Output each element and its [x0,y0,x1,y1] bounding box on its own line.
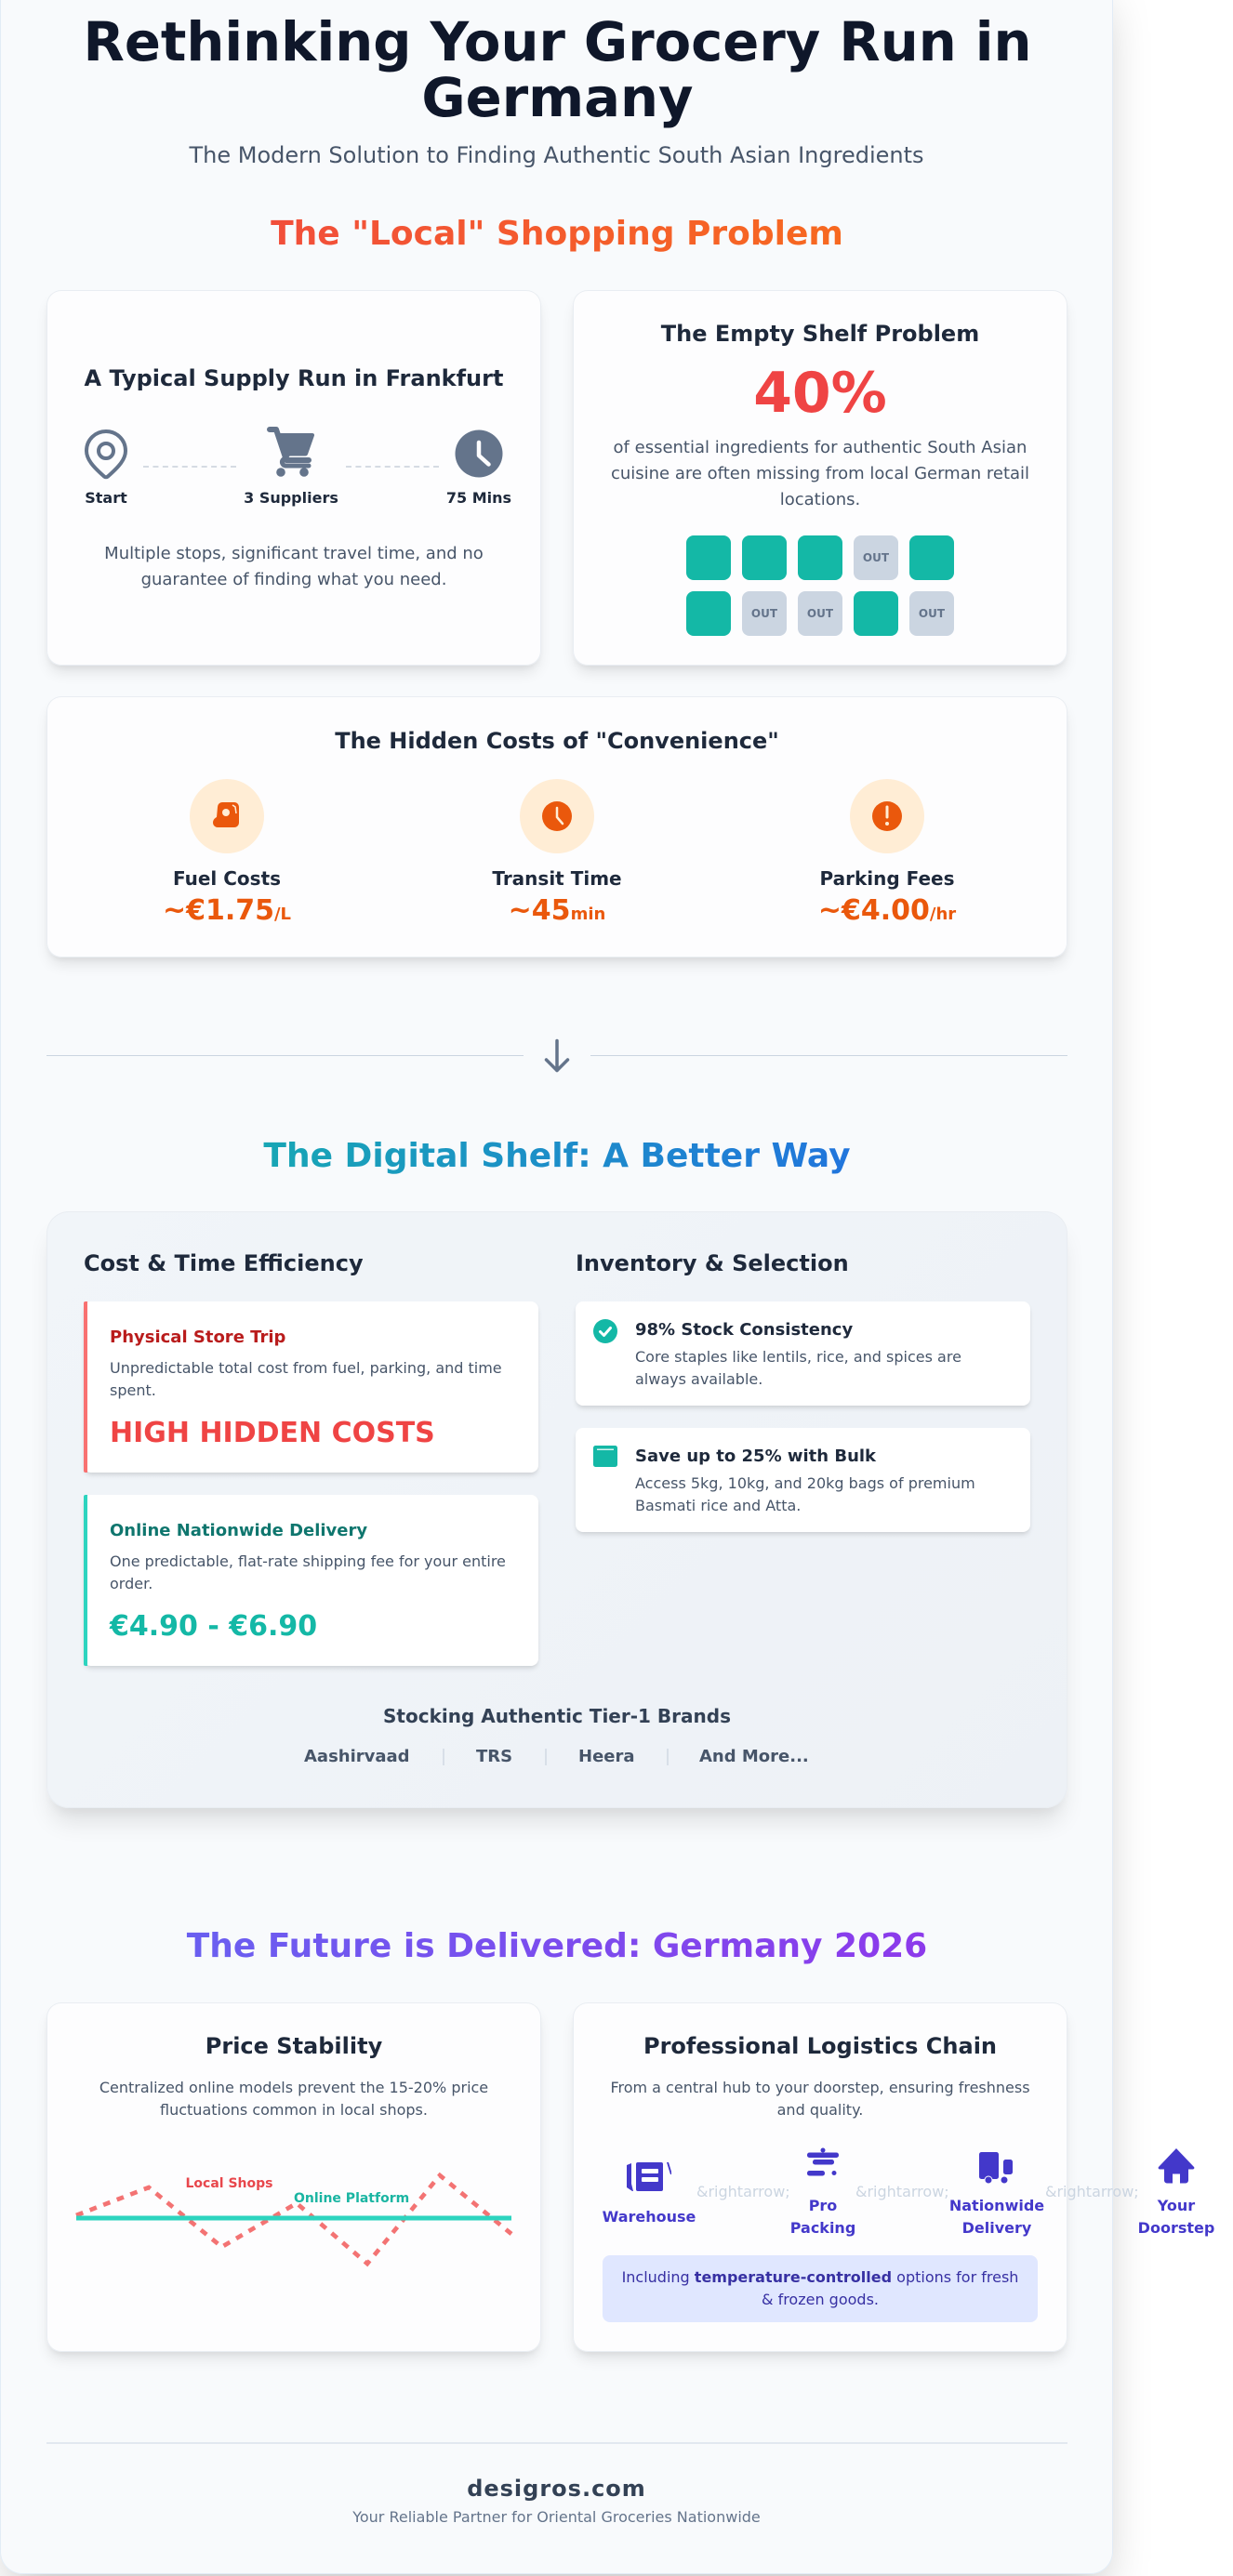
panel: typical supply run [46,290,541,666]
card text: order. [110,1575,152,1592]
shelf grid: OUT [751,607,777,620]
section heading: future: The Future is Delivered: Germany 2026 [187,1927,927,1965]
section heading: local shopping problem [46,216,1067,253]
label: your doorstep: Your [1158,2197,1195,2214]
footer: brand name: desigros.com [467,2476,646,2502]
brands row: Heera [578,1747,635,1766]
icon: packing [807,2147,839,2175]
icon: fuel [190,779,264,853]
description: Multiple stops, significant travel time, and no [104,544,484,563]
card text: spent. [110,1381,156,1399]
heading: inventory: Inventory & Selection [576,1250,849,1276]
series: local shops [76,2175,511,2264]
icon: home [1159,2148,1194,2183]
title: Germany [421,67,694,129]
icon: check [593,1319,617,1343]
card value: €4.90 - €6.90 [110,1610,317,1643]
accent: teal [84,1495,87,1666]
card: physical store trip [84,1301,538,1473]
card: stock consistency [576,1301,1030,1406]
description: From a central hub to your doorstep, ensuring freshness [610,2079,1030,2096]
section heading: local shopping problem: The "Local" Shopping Problem [271,215,843,253]
icon: transit circle [520,779,594,853]
label: pro packing: Packing [790,2219,855,2237]
stat: 40 percent: 40% [753,361,887,426]
description [99,2079,488,2119]
connector: suppliers to time [346,466,439,468]
shelf grid: OUT [807,607,833,620]
arrow: &rightarrow; [855,2183,949,2200]
card title: Online Nationwide Delivery [110,1521,367,1540]
arrow: &rightarrow; [1045,2183,1139,2200]
shelf grid: OUT [919,607,945,620]
icon: clock [456,429,502,478]
heading: hidden costs: The Hidden Costs of "Convenience" [335,728,779,754]
label: pro packing: Pro [809,2197,837,2214]
icon: bag [593,1446,617,1467]
label: parking fees: Parking Fees [819,867,955,890]
value: parking: ~€4.00/hr [818,894,956,927]
brands title: Stocking Authentic Tier-1 Brands [383,1705,731,1727]
brands row: Aashirvaad [304,1747,410,1766]
label: nationwide delivery: Delivery [962,2219,1031,2237]
card title: 98% Stock Consistency [635,1320,853,1340]
item: parking fees [818,779,956,927]
accent: red [84,1301,87,1473]
card text: Basmati rice and Atta. [635,1497,801,1514]
shelf grid [686,535,954,636]
label: start: Start [85,489,127,507]
brands row [304,1747,809,1766]
subtitle: The Modern Solution to Finding Authentic South Asian Ingredients [189,142,924,168]
heading: supply run: A Typical Supply Run in Frankfurt [85,365,503,391]
callout: temperature controlled: Including temperature-controlled options for fresh [622,2268,1018,2286]
shelf grid: OUT [863,551,889,564]
glyph: fuel [213,802,239,827]
section heading: digital shelf [46,1138,1067,1175]
brands row: TRS [476,1747,512,1766]
line chart [75,2172,513,2266]
description [611,438,1029,509]
card value: HIGH HIDDEN COSTS [110,1417,435,1449]
card text: One predictable, flat-rate shipping fee for your entire [110,1552,506,1570]
icon: warehouse [627,2162,671,2191]
item: transit time [492,779,622,927]
description: Centralized online models prevent the 15-20% price [99,2079,488,2096]
item: fuel costs [163,779,291,927]
card text: always available. [635,1370,762,1388]
panel: logistics chain [573,2002,1067,2352]
arrow: &rightarrow; [696,2183,790,2200]
icon: shopping cart [267,427,314,477]
panel: empty shelf problem [573,290,1067,666]
icon: start pin [85,429,127,480]
glyph: clock [542,801,572,831]
card: bulk savings [576,1428,1030,1532]
description [104,544,484,589]
card text [110,1552,506,1592]
arrow: down [545,1039,569,1073]
description [610,2079,1030,2119]
label: nationwide delivery: Nationwide [949,2197,1044,2214]
description: cuisine are often missing from local German retail [611,464,1029,483]
description: fluctuations common in local shops. [160,2101,428,2119]
label: suppliers: 3 Suppliers [244,489,338,507]
description: and quality. [777,2101,863,2119]
panel: price stability [46,2002,541,2352]
card text: Access 5kg, 10kg, and 20kg bags of premium [635,1474,975,1492]
card text [635,1474,975,1514]
card title: Save up to 25% with Bulk [635,1447,876,1466]
description: guarantee of finding what you need. [141,570,446,589]
label: your doorstep [1138,2197,1214,2237]
card title: Physical Store Trip [110,1328,285,1347]
label: pro packing [790,2197,855,2237]
callout: temperature controlled [603,2255,1038,2322]
panel: digital shelf [46,1211,1067,1808]
card: online delivery [84,1495,538,1666]
description: locations. [780,490,860,509]
connector: start to suppliers [143,466,236,468]
heading: empty shelf: The Empty Shelf Problem [661,321,979,347]
panel: hidden costs [46,696,1067,958]
heading: cost and time: Cost & Time Efficiency [84,1250,364,1276]
glyph: alert [872,801,902,831]
value: transit: ~45min [509,894,605,927]
heading: logistics: Professional Logistics Chain [643,2033,997,2059]
label: fuel costs: Fuel Costs [173,867,281,890]
series: online platform [76,2216,511,2220]
title [83,11,1032,129]
card text: Core staples like lentils, rice, and spices are [635,1348,961,1366]
card text [110,1359,502,1399]
card text: Unpredictable total cost from fuel, parking, and time [110,1359,502,1377]
heading: price stability: Price Stability [206,2033,382,2059]
label: online platform: Online Platform [294,2191,409,2206]
footer: tagline: Your Reliable Partner for Oriental Groceries Nationwide [352,2508,761,2526]
label: local shops: Local Shops [186,2176,272,2191]
section heading: digital shelf: The Digital Shelf: A Better Way [263,1137,851,1175]
label: minutes: 75 Mins [446,489,511,507]
label: nationwide delivery [949,2197,1044,2237]
label: transit time: Transit Time [492,867,622,890]
icon: parking circle [850,779,924,853]
brands row: And More... [699,1747,809,1766]
callout: temperature controlled: & frozen goods. [762,2291,879,2308]
description: of essential ingredients for authentic South Asian [614,438,1027,457]
value: fuel: ~€1.75/L [163,894,291,927]
icon: truck [979,2152,1013,2183]
card text [635,1348,961,1388]
title: Rethinking Your Grocery Run in [83,11,1032,73]
label: warehouse: Warehouse [603,2208,696,2226]
label: your doorstep: Doorstep [1138,2219,1214,2237]
